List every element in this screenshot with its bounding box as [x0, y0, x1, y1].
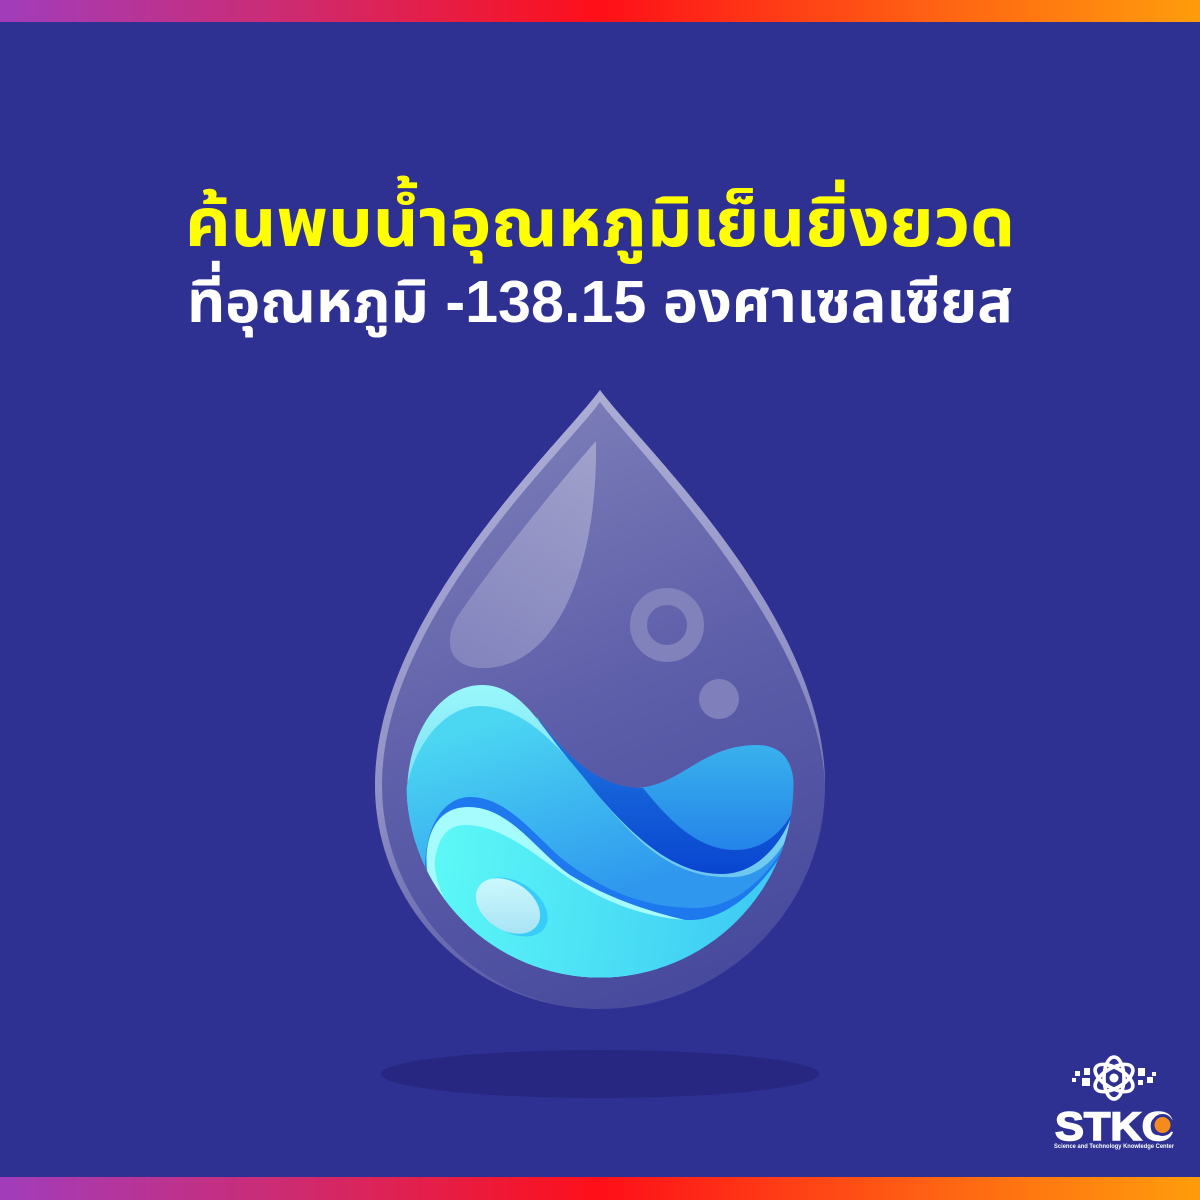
- blue wave band: [425, 797, 782, 968]
- lower wave light edge: [426, 807, 685, 978]
- water drop illustration: [375, 390, 825, 1009]
- title: [185, 175, 1015, 338]
- STKC logo: [1054, 1057, 1174, 1150]
- bubble ring: [638, 596, 696, 654]
- logo wordmark: STKC: [1055, 1105, 1173, 1149]
- back wave: [536, 717, 794, 850]
- top gradient bar: [0, 0, 1200, 22]
- droplet highlight: [476, 878, 540, 934]
- logo tagline: Science and Technology Knowledge Center: [1054, 1143, 1174, 1150]
- title line 2: ที่อุณหภูมิ -138.15 องศาเซลเซียส: [187, 260, 1013, 338]
- glass reflection: [450, 441, 596, 668]
- logo atom icon: [1091, 1057, 1137, 1099]
- drop body: [375, 390, 825, 1009]
- lower wave fill: [434, 825, 778, 978]
- main wave fill: [406, 706, 784, 908]
- small bubble: [699, 679, 739, 719]
- logo pixel dots: [1072, 1068, 1156, 1086]
- water waves: [406, 685, 794, 978]
- dark wave band: [538, 718, 791, 874]
- drop rim highlight: [375, 390, 825, 1009]
- droplet shadow: [492, 878, 548, 936]
- ground shadow: [381, 1050, 819, 1098]
- title line 1: ค้นพบน้ำอุณหภูมิเย็นยิ่งยวด: [185, 175, 1015, 264]
- logo orange dot: [1153, 1116, 1172, 1134]
- bottom gradient bar: [0, 1177, 1200, 1200]
- main wave light edge: [407, 685, 790, 978]
